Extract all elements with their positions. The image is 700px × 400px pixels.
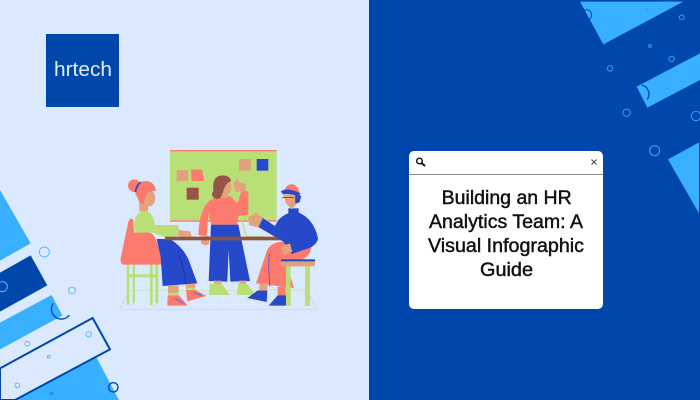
search card xyxy=(409,151,603,309)
left decorative shapes xyxy=(0,190,119,400)
search bar divider xyxy=(409,174,603,175)
floor outline xyxy=(119,290,317,309)
icon: close xyxy=(592,160,596,164)
right background panel xyxy=(369,0,700,400)
title: Guide xyxy=(480,260,533,281)
laptop xyxy=(240,216,264,237)
title xyxy=(428,188,584,281)
right decorative shapes xyxy=(580,2,700,213)
icon: magnifying glass xyxy=(417,158,425,166)
title: Analytics Team: A xyxy=(429,212,583,233)
person: woman standing in the middle xyxy=(198,175,256,295)
person: man on the right on stool xyxy=(247,184,318,306)
title: Building an HR xyxy=(442,188,572,209)
person: woman on the left in chair xyxy=(121,179,207,306)
illustration: team meeting around a table xyxy=(119,150,318,309)
title: Visual Infographic xyxy=(428,236,584,257)
table xyxy=(165,237,292,240)
left background panel xyxy=(0,0,369,400)
logo: hrtech xyxy=(46,34,119,107)
board with sticky notes xyxy=(170,150,277,222)
logo: hrtech: hrtech xyxy=(54,59,112,81)
